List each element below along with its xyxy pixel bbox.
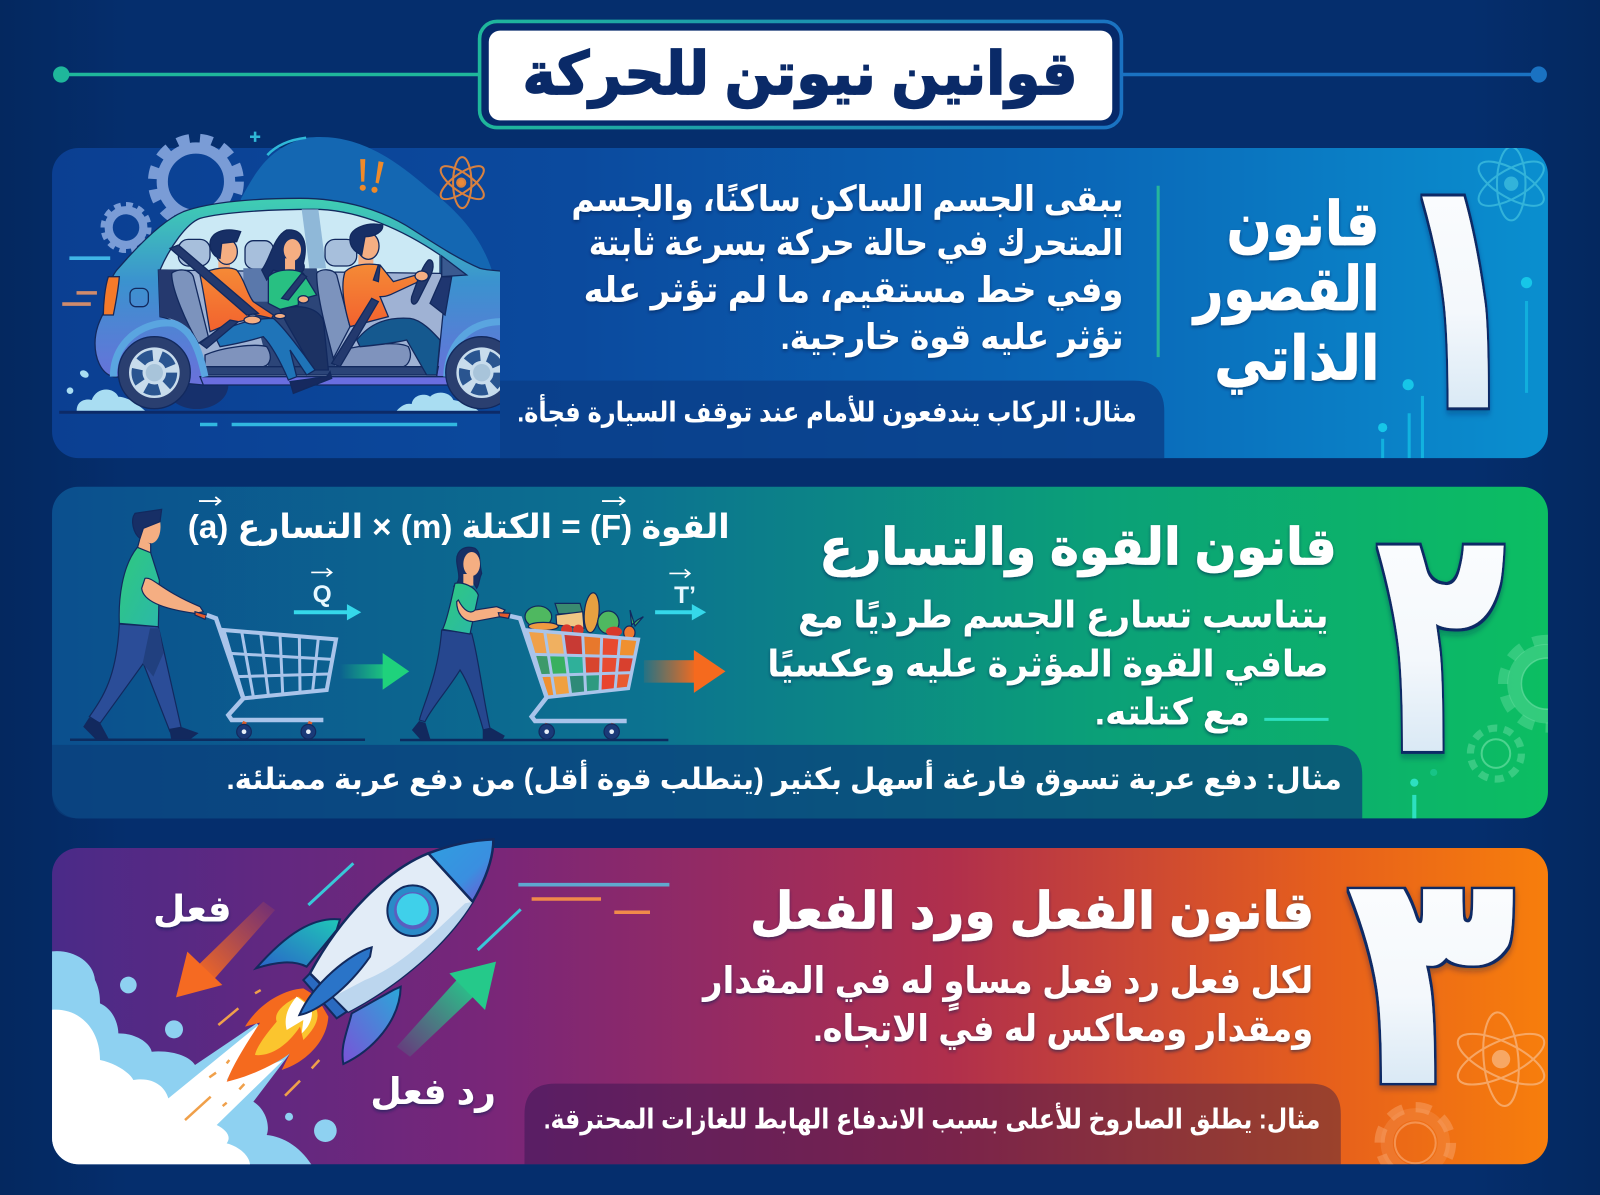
law description: وفي خط مستقيم، ما لم تؤثر عله bbox=[584, 270, 1123, 311]
vector Q label: Q bbox=[313, 581, 332, 608]
front seat bbox=[317, 270, 350, 358]
panel: third law bbox=[52, 838, 1548, 1164]
clouds bbox=[67, 369, 478, 411]
law heading: قانون القوة والتسارع bbox=[819, 518, 1337, 577]
windows bbox=[160, 209, 440, 275]
title banner bbox=[480, 21, 1121, 128]
panel: first law bbox=[52, 132, 1548, 458]
law description bbox=[767, 595, 1329, 733]
vector T label bbox=[655, 569, 706, 620]
law heading: القصور bbox=[1191, 255, 1380, 325]
icon: atom orange bbox=[436, 157, 488, 208]
clouds bbox=[50, 951, 337, 1165]
law description: المتحرك في حالة حركة بسرعة ثابتة bbox=[589, 223, 1123, 264]
illustration: man with empty cart bbox=[70, 509, 365, 740]
illustration: car with passengers bbox=[67, 198, 518, 411]
law description: تؤثر عليه قوة خارجية. bbox=[781, 317, 1123, 358]
law description: مع كتلته. bbox=[1095, 691, 1250, 733]
window bbox=[387, 885, 438, 936]
icon: small gear bbox=[104, 205, 148, 250]
groceries bbox=[525, 606, 552, 627]
illustration backdrop blob bbox=[241, 137, 500, 376]
example text: مثال: يطلق الصاروخ للأعلى بسبب الاندفاع الهابط للغازات المحترقة. bbox=[544, 1102, 1320, 1136]
gears watermark bbox=[1466, 634, 1548, 783]
basket produce bbox=[527, 630, 638, 697]
car body bbox=[95, 198, 505, 385]
law description: ومقدار ومعاكس له في الاتجاه. bbox=[813, 1008, 1313, 1050]
empty cart bbox=[207, 615, 336, 727]
formula: القوة (F) = الكتلة (m) × التسارع (a) bbox=[188, 509, 730, 547]
road bbox=[59, 411, 500, 414]
speed streaks bbox=[518, 885, 669, 912]
wheel arches bbox=[113, 323, 205, 377]
back seat bbox=[172, 270, 208, 343]
law heading: قانون الفعل ورد الفعل bbox=[750, 883, 1314, 942]
arrow: action bbox=[176, 902, 275, 997]
title text: قوانين نيوتن للحركة bbox=[522, 40, 1078, 109]
woman passenger bbox=[280, 307, 328, 370]
gear watermark bbox=[1380, 1107, 1451, 1179]
illustration: woman with full cart bbox=[400, 547, 668, 740]
full cart frame bbox=[510, 616, 638, 728]
arrow: orange bbox=[644, 650, 726, 693]
icon: large gear bbox=[153, 139, 239, 224]
example bar bbox=[500, 381, 1164, 458]
fins bbox=[256, 919, 340, 968]
vector T label: T’ bbox=[674, 582, 696, 609]
body bbox=[310, 853, 473, 1012]
tail light and cap bbox=[103, 277, 119, 315]
sparks bbox=[185, 990, 319, 1120]
atom watermark top right bbox=[1478, 148, 1545, 222]
panel: second law bbox=[52, 486, 1548, 818]
label: reaction: رد فعل bbox=[370, 1071, 496, 1113]
floor and sill bbox=[205, 367, 438, 375]
example bar bbox=[52, 745, 1362, 818]
label: action: فعل bbox=[153, 888, 232, 929]
rear wheel bbox=[118, 337, 190, 409]
law description bbox=[571, 179, 1123, 358]
interior bbox=[158, 270, 447, 377]
atom watermark bbox=[1451, 1011, 1551, 1107]
law description bbox=[701, 960, 1313, 1050]
back passenger bbox=[218, 260, 230, 268]
circuit accents bbox=[1378, 277, 1532, 458]
accent dots bbox=[1410, 769, 1437, 818]
law description: صافي القوة المؤثرة عليه وعكسيًا bbox=[767, 644, 1329, 686]
law description: يتناسب تسارع الجسم طرديًا مع bbox=[798, 595, 1329, 637]
example text: مثال: دفع عربة تسوق فارغة أسهل بكثير (يتطلب قوة أقل) من دفع عربة ممتلئة. bbox=[227, 760, 1342, 796]
vector Q label bbox=[294, 568, 361, 620]
number three: ٣ bbox=[1350, 807, 1513, 1150]
arrow: reaction bbox=[397, 962, 496, 1057]
rocket illustration bbox=[185, 839, 521, 1120]
driver bbox=[358, 255, 373, 265]
rocket streaks bbox=[308, 863, 521, 950]
law heading bbox=[1191, 190, 1380, 395]
icon: plus and arc bbox=[250, 132, 306, 155]
speed lines bbox=[62, 258, 457, 424]
law description: يبقى الجسم الساكن ساكنًا، والجسم bbox=[571, 179, 1123, 220]
number one: ١ bbox=[1393, 101, 1527, 484]
example bar bbox=[524, 1084, 1341, 1164]
front wheel bbox=[445, 336, 500, 410]
number two: ٢ bbox=[1378, 456, 1504, 822]
law description: لكل فعل رد فعل مساوٍ له في المقدار bbox=[701, 960, 1313, 1012]
example text: مثال: الركاب يندفعون للأمام عند توقف السيارة فجأة. bbox=[517, 393, 1137, 428]
divider bbox=[1157, 186, 1160, 357]
arrow: green bbox=[340, 653, 409, 690]
flame bbox=[227, 988, 328, 1082]
left title connector bbox=[53, 66, 480, 83]
right title connector bbox=[1121, 66, 1547, 83]
formula vector arrows bbox=[199, 497, 624, 505]
law heading: قانون bbox=[1227, 190, 1380, 260]
law heading: الذاتي bbox=[1214, 325, 1380, 395]
icon: exclamation marks bbox=[360, 159, 384, 193]
